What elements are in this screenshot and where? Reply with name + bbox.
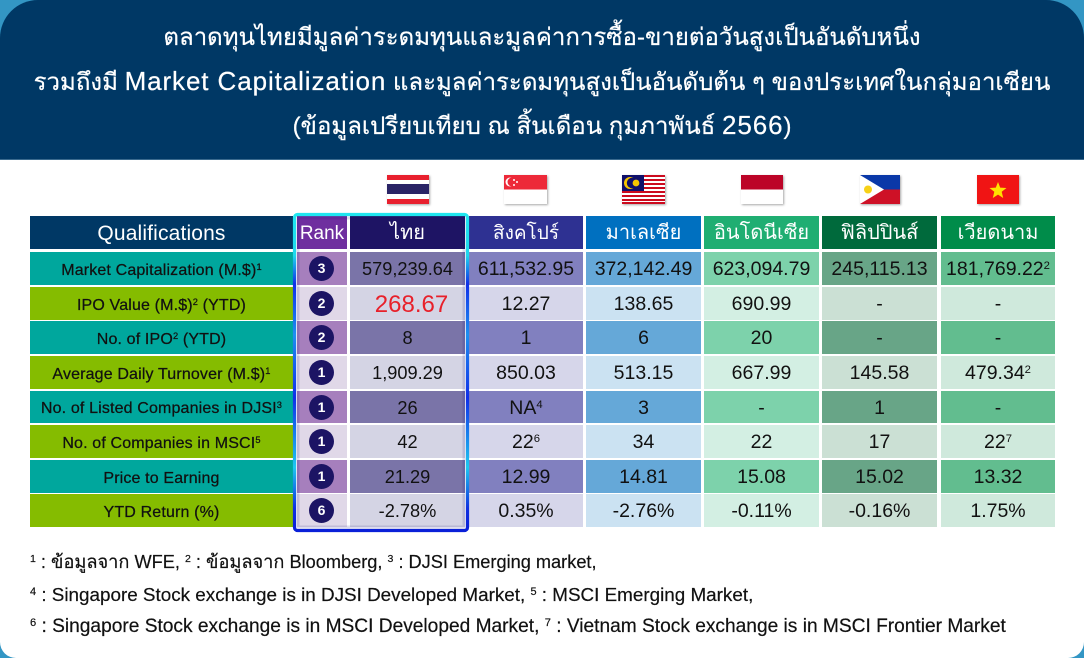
row: Average Daily Turnover: 1,909.29 (372, 363, 443, 383)
row: No. of IPO: 1 (521, 327, 531, 349)
rank badge 1 (297, 391, 347, 423)
rank badge 3 (297, 252, 347, 285)
rank badge 1 (297, 356, 347, 389)
row: Average Daily Turnover: 479.342 (965, 362, 1031, 384)
rank badge 6 (297, 494, 347, 527)
row: Average Daily Turnover (30, 356, 1055, 389)
row: No. of IPO: - (995, 327, 1001, 349)
rank badge 1 (297, 460, 347, 493)
header: Qualifications (30, 216, 293, 249)
row: Market Capitalization (30, 252, 1055, 285)
highlight frame around Thailand column (292, 212, 470, 532)
rank badge 1: 1 (318, 364, 325, 380)
header: Malaysia (586, 216, 701, 249)
header: Singapore: สิงคโปร์ (493, 223, 559, 244)
row: Market Capitalization: 611,532.95 (478, 258, 574, 280)
row: Companies in MSCI: 34 (633, 431, 654, 453)
header: Malaysia: มาเลเซีย (606, 222, 681, 244)
row: YTD Return: YTD Return (%) (104, 504, 219, 521)
header: Rank (297, 216, 347, 249)
rank badge 1 (297, 425, 347, 458)
row: IPO Value (30, 287, 1055, 320)
row: Price to Earning: Price to Earning (103, 470, 220, 487)
header: Philippines (822, 216, 937, 249)
row: IPO Value: 12.27 (502, 293, 550, 315)
header: Indonesia (704, 216, 819, 249)
row: Companies in MSCI: 42 (397, 432, 418, 452)
row: YTD Return: 1.75% (970, 500, 1026, 522)
row: Market Capitalization: 181,769.222 (946, 258, 1050, 280)
header: Thailand: ไทย (390, 222, 425, 244)
rank badge 1: 1 (318, 468, 325, 484)
title line 1: ตลาดทุนไทยมีมูลค่าระดมทุนและมูลค่าการซื้อ-ขายต่อวันสูงเป็นอันดับหนึ่ง (163, 24, 921, 51)
row: Price to Earning: 15.08 (737, 466, 786, 488)
row: YTD Return: -2.76% (613, 500, 674, 522)
rank badge 6: 6 (318, 502, 325, 518)
rank badge 2 (297, 287, 347, 320)
footnote line 3: 6 : Singapore Stock exchange is in MSCI Developed Market, 7 : Vietnam Stock exchange is in MSCI Frontier Market (30, 616, 1006, 637)
icon: Vietnam flag (976, 174, 1022, 206)
header: Rank: Rank (300, 223, 344, 244)
row: IPO Value: 690.99 (732, 293, 791, 315)
row: Average Daily Turnover: 145.58 (850, 362, 909, 384)
footnote line 2: 4 : Singapore Stock exchange is in DJSI Developed Market, 5 : MSCI Emerging Market, (30, 584, 753, 605)
footnotes (30, 552, 1006, 637)
icon: Singapore flag (504, 174, 550, 206)
header: Vietnam (941, 216, 1055, 249)
row: No. of IPO: - (876, 327, 883, 349)
icon: Malaysia flag (622, 174, 668, 206)
row: YTD Return: -0.11% (731, 500, 792, 522)
rank badge 2 (297, 321, 347, 354)
row: YTD Return: 0.35% (498, 500, 554, 522)
row: No. of IPO: 20 (751, 327, 772, 349)
title line 2: รวมถึงมี Market Capitalization และมูลค่าระดมทุนสูงเป็นอันดับต้น ๆ ของประเทศในกลุ่มอาเซียน (34, 66, 1050, 96)
row: Listed Companies in DJSI: NA4 (509, 397, 543, 419)
row: Listed Companies in DJSI: - (758, 397, 765, 419)
row: No. of IPO: No. of IPO2 (YTD) (97, 331, 226, 348)
icon: Philippines flag (860, 174, 902, 206)
row: Listed Companies in DJSI (30, 391, 1055, 423)
header: Vietnam: เวียดนาม (958, 222, 1038, 244)
row: Average Daily Turnover: 667.99 (732, 362, 791, 384)
row: Listed Companies in DJSI: 1 (874, 397, 885, 419)
row: IPO Value: - (995, 293, 1001, 315)
icon: Indonesia flag (740, 174, 786, 206)
row: Average Daily Turnover: Average Daily Turnover (M.$)1 (52, 366, 271, 383)
row: Market Capitalization: 245,115.13 (831, 258, 928, 280)
rank badge 3: 3 (318, 260, 325, 276)
rank badge 1: 1 (318, 433, 325, 449)
row: No. of IPO: 6 (638, 327, 649, 349)
row: IPO Value: IPO Value (M.$)2 (YTD) (77, 297, 246, 314)
header: Singapore (469, 216, 583, 249)
row: No. of IPO: 8 (402, 328, 413, 348)
row: Price to Earning (30, 460, 1055, 493)
row: Price to Earning: 21.29 (385, 467, 430, 487)
row: Average Daily Turnover: 513.15 (614, 362, 673, 384)
row: Price to Earning: 13.32 (974, 466, 1022, 488)
row: Market Capitalization: 579,239.64 (362, 259, 453, 279)
row: IPO Value: 268.67 (375, 291, 448, 318)
header: Thailand (350, 216, 465, 249)
row: Companies in MSCI: 22 (751, 431, 772, 453)
row: Listed Companies in DJSI: - (995, 397, 1001, 419)
row: Listed Companies in DJSI: No. of Listed Companies in DJSI3 (41, 400, 282, 417)
row: IPO Value: 138.65 (614, 293, 673, 315)
row: Listed Companies in DJSI: 3 (638, 397, 649, 419)
row: YTD Return (30, 494, 1055, 527)
row: No. of IPO (30, 321, 1055, 354)
title banner (0, 0, 1084, 160)
row: Companies in MSCI: No. of Companies in MSCI5 (62, 435, 261, 452)
row: YTD Return: -2.78% (379, 501, 436, 521)
row: Price to Earning: 15.02 (855, 466, 904, 488)
icon: Thailand flag (386, 174, 432, 206)
row: Price to Earning: 14.81 (619, 466, 668, 488)
row: Companies in MSCI: 17 (869, 431, 890, 453)
rank badge 2: 2 (318, 295, 325, 311)
header: Indonesia: อินโดนีเซีย (714, 222, 809, 244)
row: Companies in MSCI (30, 425, 1055, 458)
row: Price to Earning: 12.99 (502, 466, 550, 488)
footnote line 1: 1 : ข้อมูลจาก WFE, 2 : ข้อมูลจาก Bloomberg, 3 : DJSI Emerging market, (30, 552, 597, 572)
row: IPO Value: - (876, 293, 883, 315)
header: Philippines: ฟิลิปปินส์ (841, 222, 918, 244)
row: Market Capitalization: 372,142.49 (595, 258, 692, 280)
rank badge 1: 1 (318, 398, 325, 414)
row: Market Capitalization: Market Capitalization (M.$)1 (61, 262, 262, 279)
table header row (30, 216, 1055, 249)
rank badge 2: 2 (318, 329, 325, 345)
header: Qualifications: Qualifications (97, 222, 226, 245)
row: Companies in MSCI: 226 (512, 431, 540, 453)
row: Average Daily Turnover: 850.03 (496, 362, 556, 384)
row: Listed Companies in DJSI: 26 (397, 398, 418, 418)
row: Market Capitalization: 623,094.79 (713, 258, 810, 280)
row: Companies in MSCI: 227 (984, 431, 1012, 453)
row: YTD Return: -0.16% (849, 500, 910, 522)
title line 3: (ข้อมูลเปรียบเทียบ ณ สิ้นเดือน กุมภาพันธ์ 2566) (293, 110, 791, 140)
